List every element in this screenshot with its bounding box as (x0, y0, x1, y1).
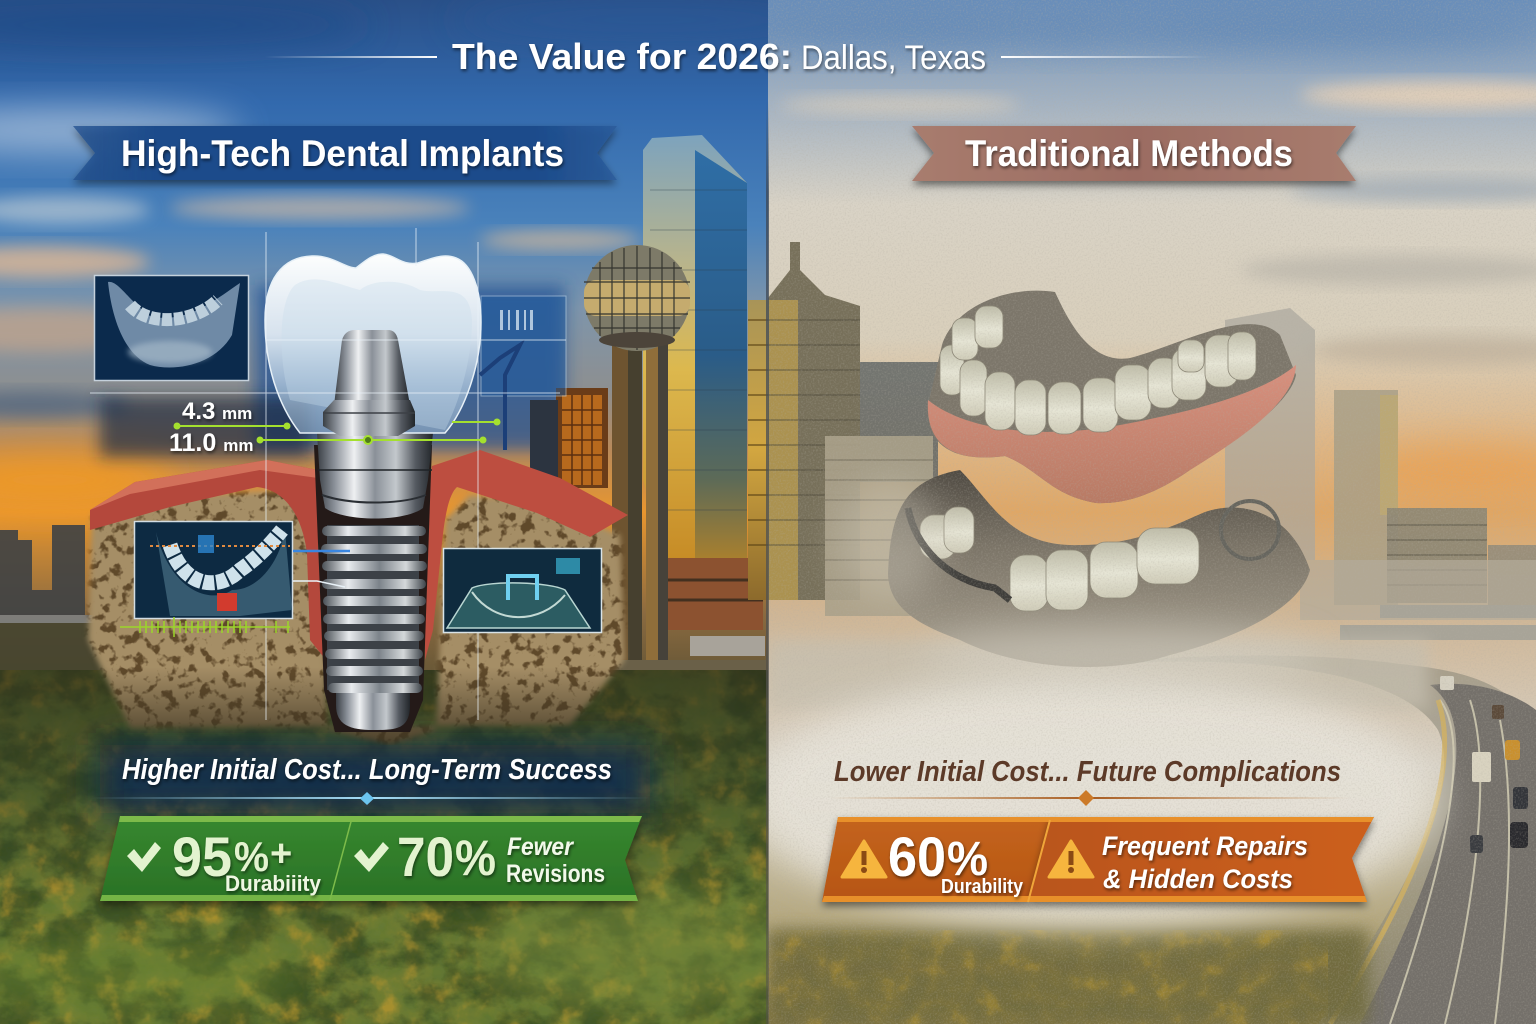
gold building crossing the divider (748, 300, 768, 600)
scan panel: teeth scan (134, 522, 292, 618)
title: The Value for 2026: (452, 36, 792, 77)
foliage left (0, 670, 800, 1024)
ribbon: traditional stats (822, 817, 1374, 902)
left sky background (0, 0, 850, 1024)
upper teeth (940, 306, 1256, 435)
icon: check (354, 842, 389, 872)
stat: 60% durability: 60 (888, 825, 946, 888)
stat: 70% fewer revisions: Revisions (506, 860, 605, 888)
stat: 95%+ durability: Durabiiity (225, 871, 322, 896)
crown (265, 254, 481, 433)
upper denture (928, 291, 1296, 503)
panel: high-tech dental implant illustration (80, 228, 630, 745)
text: frequent repairs and hidden costs: Frequent Repairs (1102, 831, 1308, 861)
measurement: 11.0 mm: 11.0 mm (169, 429, 253, 457)
panel: traditional dentures illustration (840, 291, 1320, 683)
text: frequent repairs and hidden costs: & Hidden Costs (1103, 864, 1293, 894)
measurement lines (174, 420, 500, 444)
title: Dallas, Texas (801, 39, 986, 77)
guide lines (90, 228, 566, 720)
stat: 60% durability (888, 825, 1024, 898)
title (265, 36, 1210, 77)
metal clasp (908, 508, 1010, 600)
Reunion Tower (584, 245, 766, 670)
bone (80, 485, 630, 745)
measurement: 4.3 mm: 4.3 mm (182, 398, 252, 425)
ribbon: implant stats (100, 816, 642, 901)
heading banner: High-Tech Dental Implants (73, 126, 617, 180)
heading banner: Traditional Methods: Traditional Methods (965, 133, 1293, 174)
tagline: implants: Higher Initial Cost... Long-Term Success (122, 754, 612, 786)
stat: 70% fewer revisions: % (455, 830, 496, 886)
icon: warning (842, 841, 886, 877)
scan panel: jaw x-ray (94, 276, 248, 380)
dark band behind tagline (100, 745, 650, 813)
left distant skyline (0, 525, 104, 670)
blue tech backdrop behind crown (255, 285, 565, 450)
tagline: traditional: Lower Initial Cost... Future Complications (834, 756, 1341, 788)
tagline: traditional (830, 756, 1350, 806)
connector: blue scan line (293, 550, 350, 552)
stat: 70% fewer revisions: 70 (397, 825, 454, 888)
stat: 95%+ durability (172, 825, 322, 896)
stat: 70% fewer revisions: Fewer (507, 833, 574, 861)
center divider (766, 100, 769, 1024)
stat: 70% fewer revisions (397, 825, 605, 888)
right tower block behind Reunion (530, 388, 763, 630)
icon: warning (1049, 841, 1093, 877)
heading banner: Traditional Methods (912, 126, 1356, 181)
waveform (120, 617, 290, 637)
lower denture (888, 470, 1310, 667)
tagline: implants (90, 754, 650, 805)
overpass and highway (1290, 605, 1536, 1024)
denture haze (920, 627, 1320, 683)
stat: 95%+ durability: % (234, 833, 269, 880)
scan panel: bone cross-section (444, 548, 602, 632)
tech overlay panel (480, 296, 566, 450)
text: frequent repairs and hidden costs (1102, 831, 1308, 894)
haze and foliage right (768, 930, 1368, 1024)
stat: 95%+ durability: + (270, 833, 292, 875)
stat: 60% durability: Durability (941, 876, 1024, 898)
stat: 95%+ durability: 95 (172, 825, 232, 888)
hazy skyline right (768, 242, 1536, 620)
abutment (323, 330, 415, 436)
socket shadow (314, 445, 432, 732)
heading banner: High-Tech Dental Implants: High-Tech Dental Implants (121, 133, 564, 174)
icon: check (127, 842, 161, 872)
stat: 60% durability: % (947, 833, 988, 886)
Bank of America tower (643, 135, 747, 560)
implant screw (317, 433, 433, 730)
right sky background (700, 0, 1536, 1024)
connector: callout line (293, 581, 345, 587)
measurement backdrop (100, 397, 310, 457)
gum tissue (90, 460, 326, 660)
lower teeth (920, 507, 1199, 611)
